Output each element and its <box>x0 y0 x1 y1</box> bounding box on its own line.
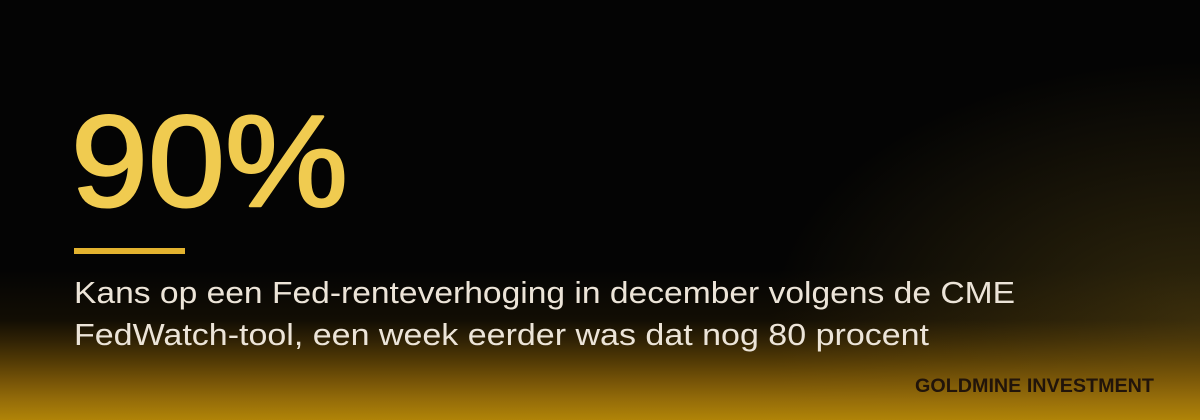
accent rule <box>74 248 185 254</box>
description text: FedWatch-tool, een week eerder was dat nog 80 procent <box>74 317 929 352</box>
big statistic: 90% <box>71 88 348 234</box>
description text <box>74 275 1015 352</box>
description text: Kans op een Fed-renteverhoging in december volgens de CME <box>74 275 1015 310</box>
brand name: GOLDMINE INVESTMENT <box>915 376 1154 397</box>
